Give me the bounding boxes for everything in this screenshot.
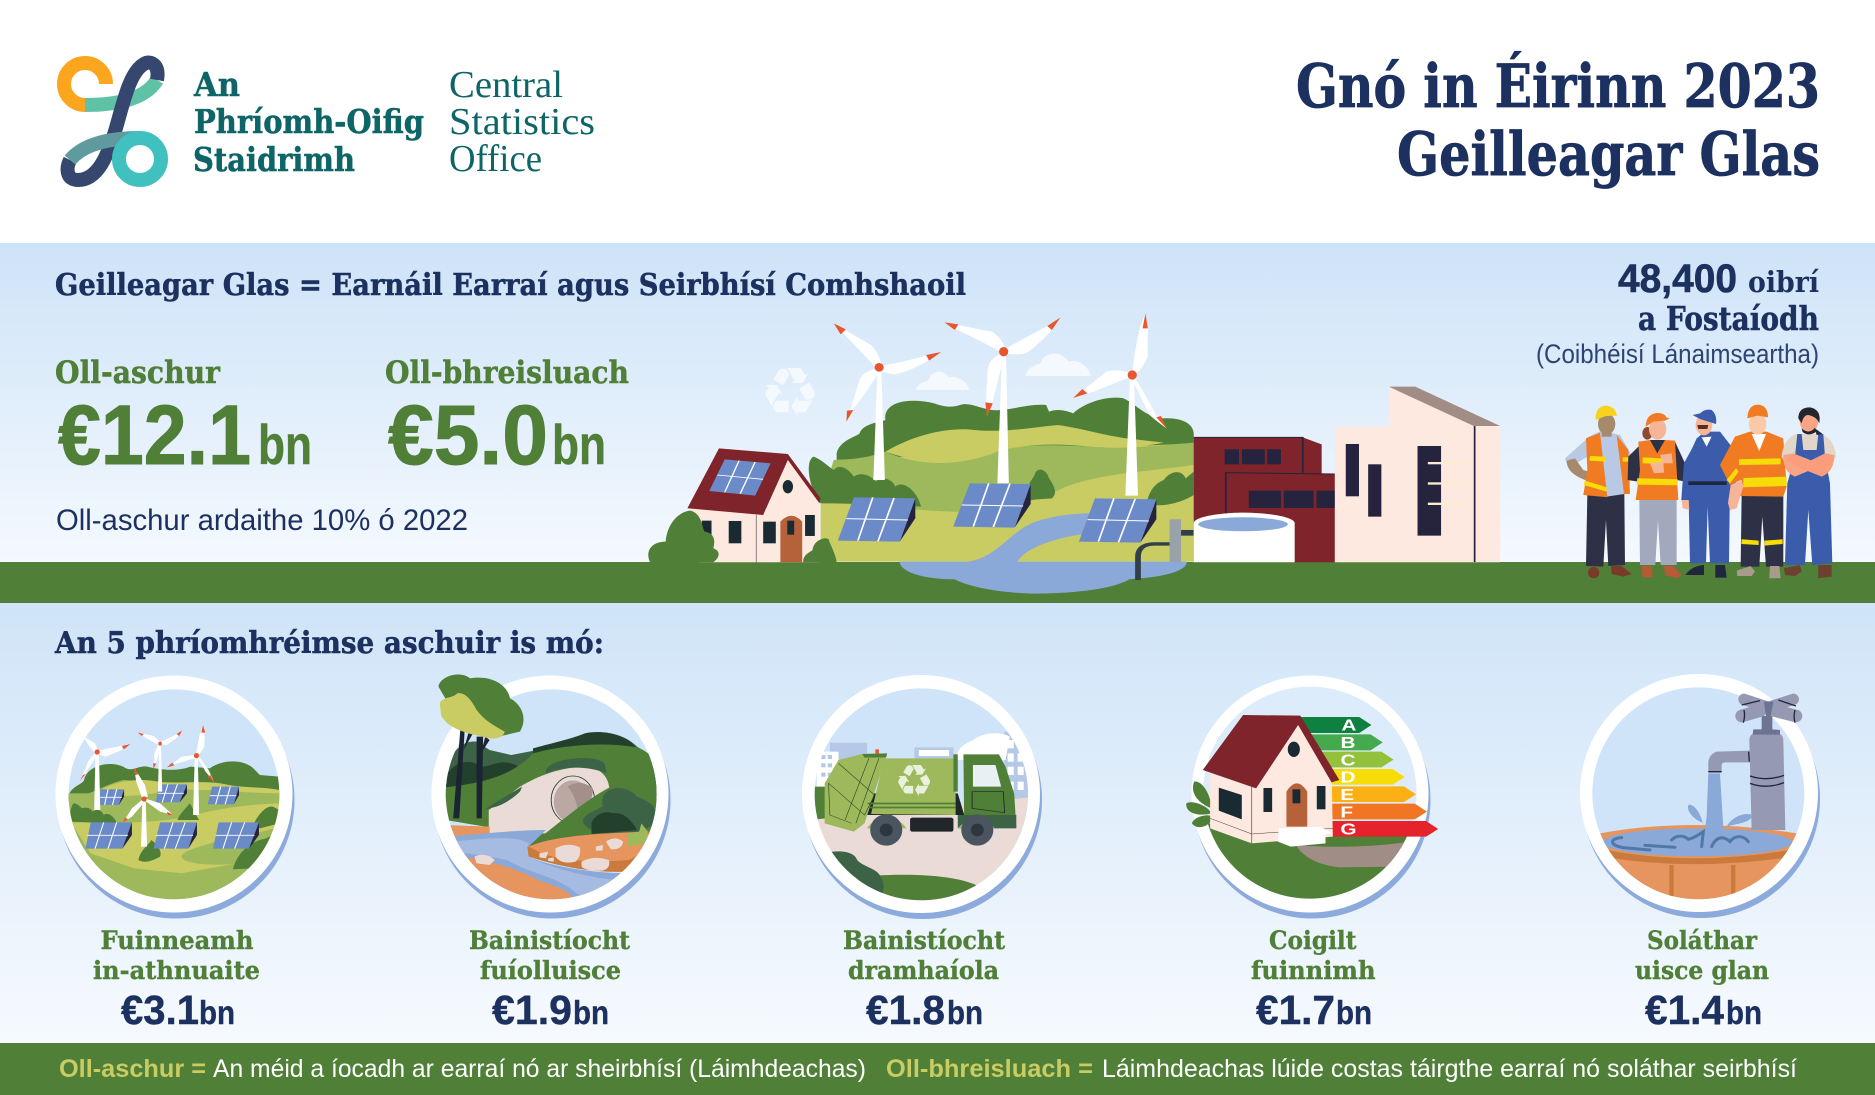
statistic: gross output [55, 355, 312, 482]
worker 5 [1782, 407, 1836, 578]
logo text: English name: Statistics [449, 101, 595, 143]
label: wastewater management: Bainistíocht [469, 926, 630, 955]
water [900, 513, 1187, 594]
illustration: five workers [1565, 405, 1836, 578]
icon: waste management [810, 683, 1036, 907]
illustration: green landscape [648, 313, 1500, 594]
label: energy saving: Coigilt [1269, 926, 1357, 955]
ground band [0, 562, 1875, 603]
statistic: gross value added: bn [552, 413, 606, 476]
text: output increase: Oll-aschur ardaithe 10% ó 2022 [56, 504, 468, 537]
logo text: Irish name: Phríomh-Oifig [194, 102, 424, 141]
footer definitions: An méid a íocadh ar earraí nó ar sheirbhísí (Láimhdeachas) [213, 1055, 866, 1083]
garbage truck [825, 749, 1016, 846]
logo text: Irish name: An [193, 65, 240, 104]
panel: top products background [0, 602, 1875, 1044]
label: wastewater management: fuíolluisce [480, 956, 621, 985]
footer definitions: Oll-aschur = [59, 1055, 206, 1083]
statistic: gross output: Oll-aschur [55, 355, 221, 391]
tap [1708, 699, 1796, 830]
house [1203, 715, 1339, 847]
footer definitions [59, 1055, 1797, 1083]
solar panel 1 [838, 497, 915, 542]
statistic: gross output: €12.1 [58, 388, 251, 482]
clouds [916, 354, 1091, 390]
label: energy saving: bn [1336, 994, 1372, 1031]
water tank [1194, 513, 1295, 562]
logo text: Irish name: Staidrimh [193, 140, 355, 179]
statistic: employment: oibrí [1748, 265, 1819, 299]
logo text: English name [449, 64, 595, 180]
logo text: English name: Office [449, 138, 542, 180]
heading: green economy definition: Geilleagar Glas = Earnáil Earraí agus Seirbhísí Comhshaoil [55, 268, 966, 303]
footer definitions: Oll-bhreisluach = [886, 1055, 1093, 1083]
energy rating arrows: A [1341, 716, 1356, 734]
footer definitions: Láimhdeachas lúide costas táirgthe earraí nó soláthar seirbhísí [1102, 1055, 1797, 1083]
label: wastewater management: €1.9 [492, 987, 572, 1033]
label: energy saving: €1.7 [1256, 987, 1335, 1033]
wind turbine 3 [1073, 313, 1167, 496]
hills [809, 398, 1194, 562]
energy rating arrows: G [1340, 820, 1357, 838]
red factory [1194, 437, 1335, 562]
label: renewable energy [93, 926, 260, 1033]
footer band [0, 1043, 1875, 1095]
label: renewable energy: bn [199, 994, 235, 1031]
solar panel 3 [1079, 498, 1156, 543]
logo text: Irish name [193, 65, 424, 179]
circle frames [56, 674, 1820, 919]
title [1296, 51, 1820, 190]
label: renewable energy: €3.1 [121, 987, 199, 1033]
heading: top five products: An 5 phríomhréimse aschuir is mó: [54, 626, 604, 661]
worker 2 [1628, 413, 1686, 578]
leaves [1186, 782, 1214, 827]
water stream [1612, 773, 1753, 850]
label: clean water supply: €1.4 [1645, 987, 1724, 1033]
icon: energy saving [1186, 683, 1438, 903]
solar panel 2 [953, 483, 1031, 528]
statistic: gross value added: €5.0 [388, 388, 548, 482]
label: energy saving: fuinnimh [1251, 956, 1376, 985]
label: waste management: dramhaíola [848, 956, 999, 985]
energy rating arrows [1300, 716, 1438, 838]
icon: truck recycling symbol: ♻ [894, 756, 934, 807]
label: waste management: €1.8 [866, 987, 945, 1033]
energy rating arrows: C [1341, 751, 1356, 769]
label: renewable energy: in-athnuaite [93, 956, 260, 985]
worker 4 [1720, 405, 1787, 578]
icon: recycling symbol: ♻ [760, 354, 820, 433]
label: waste management: Bainistíocht [843, 926, 1005, 955]
statistic: employment: a Fostaíodh [1638, 299, 1819, 338]
statistic: employment: (Coibhéisí Lánaimseartha) [1536, 339, 1819, 369]
energy rating arrows: E [1340, 785, 1354, 803]
statistic: employment [1536, 257, 1819, 369]
label: waste management: bn [947, 994, 983, 1031]
label: clean water supply: bn [1726, 994, 1762, 1031]
panel: green economy background [0, 243, 1875, 563]
house with rooftop solar [648, 448, 837, 562]
wind turbine 1 [834, 323, 941, 480]
logo mark [64, 63, 161, 180]
cream building [1335, 387, 1500, 562]
label: energy saving [1251, 926, 1376, 1033]
icon: wastewater management [438, 675, 663, 903]
worker 1 [1565, 406, 1632, 578]
label: clean water supply: Soláthar [1647, 926, 1758, 955]
tree [438, 675, 524, 818]
label: wastewater management [469, 926, 630, 1033]
statistic: gross output: bn [258, 413, 312, 476]
statistic: gross value added [385, 355, 629, 482]
label: clean water supply [1635, 926, 1769, 1033]
energy rating arrows: B [1341, 733, 1356, 751]
label: renewable energy: Fuinneamh [100, 926, 254, 955]
energy rating arrows: D [1341, 768, 1356, 786]
pipe and pump [1138, 519, 1194, 580]
wind turbine 2 [945, 317, 1060, 483]
worker 3 [1681, 410, 1737, 578]
energy rating arrows: F [1340, 803, 1353, 821]
icon: clean water supply [1590, 683, 1807, 905]
statistic: gross value added: Oll-bhreisluach [385, 355, 629, 391]
icon: renewable energy [65, 687, 286, 903]
label: waste management [843, 926, 1005, 1033]
statistic: employment: 48,400 [1618, 257, 1737, 301]
logo text: English name: Central [449, 64, 563, 106]
label: clean water supply: uisce glan [1635, 956, 1769, 985]
label: wastewater management: bn [573, 994, 609, 1031]
